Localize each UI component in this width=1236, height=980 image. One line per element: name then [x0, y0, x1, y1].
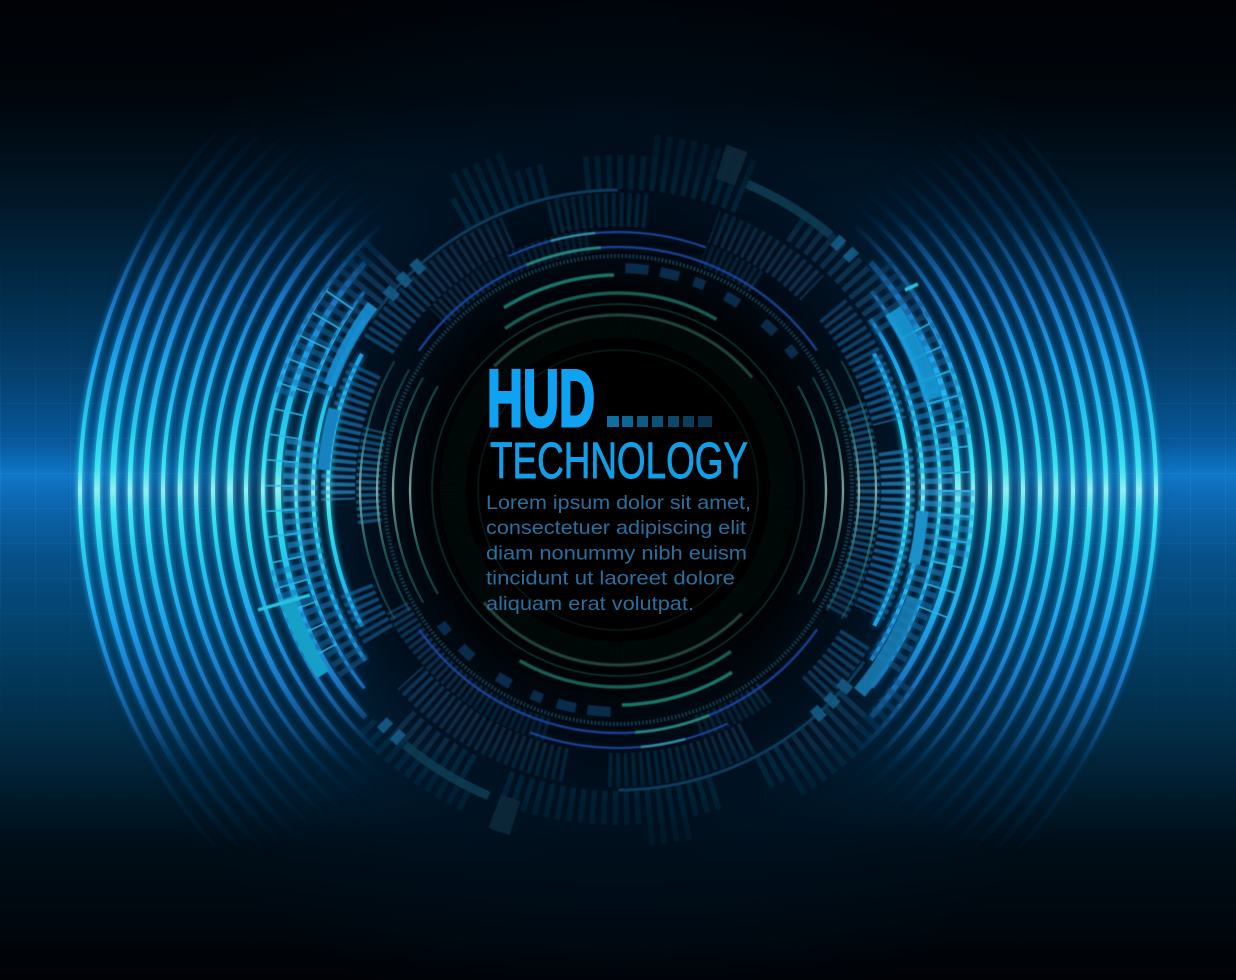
- HUD equalizer tick rings: [272, 144, 964, 836]
- HUD coloured ring segments, lower half mirrored: [274, 146, 962, 834]
- icon: fading progress squares: [607, 416, 712, 427]
- pale inner side arcs: [360, 232, 876, 748]
- body text block: consectetuer adipiscing elit: [486, 517, 747, 539]
- body text block: Lorem ipsum dolor sit amet,: [486, 492, 751, 514]
- body text block: tincidunt ut laoreet dolore: [486, 568, 735, 590]
- HUD coloured ring segments, upper half: [274, 146, 962, 834]
- body text block: aliquam erat volutpat.: [486, 593, 694, 615]
- side ladder rings: [264, 288, 972, 654]
- body text block: [486, 492, 751, 615]
- sound wave arcs left and right: [74, 148, 1162, 832]
- subtitle: TECHNOLOGY: TECHNOLOGY: [490, 432, 748, 489]
- title: HUD: HUD: [487, 354, 595, 444]
- bright cyan HUD segments: [258, 142, 966, 838]
- body text block: diam nonummy nibh euism: [486, 542, 747, 564]
